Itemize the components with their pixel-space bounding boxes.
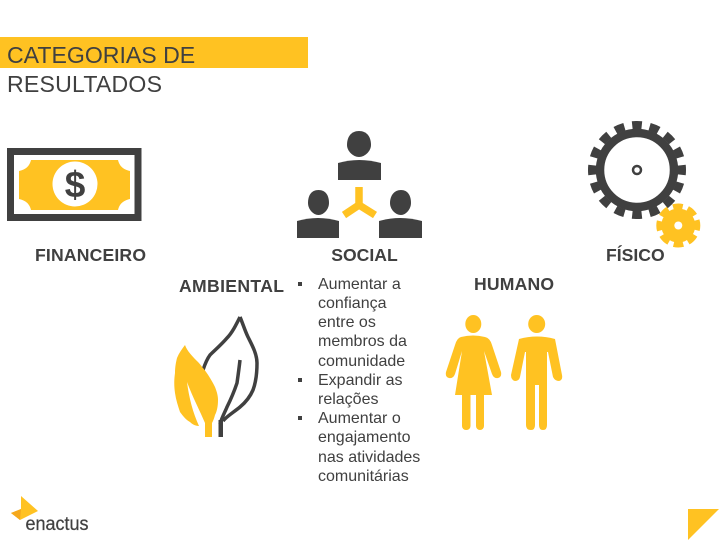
- bullet list: Aumentar a: [318, 276, 401, 293]
- icon: small yellow gear: [660, 207, 697, 244]
- icon: gears: [592, 125, 697, 244]
- corner triangle: [688, 509, 719, 540]
- bullet list: comunitárias: [318, 468, 409, 485]
- icon: woman and man: [446, 315, 562, 430]
- label: fisico: FÍSICO: [606, 244, 665, 265]
- icon: leaves: [174, 317, 257, 437]
- bullet list: nas atividades: [318, 449, 420, 466]
- icon: woman: [446, 315, 501, 430]
- logo: enactus: [11, 496, 89, 535]
- icon: banknote: [10, 152, 138, 218]
- label: humano: HUMANO: [474, 274, 554, 294]
- bullet list: Expandir as: [318, 372, 402, 389]
- icon: social group: [297, 131, 422, 238]
- label: social: SOCIAL: [331, 245, 398, 265]
- bullet list: entre os: [318, 314, 376, 331]
- bullet list: membros da: [318, 333, 407, 350]
- title: [0, 37, 308, 97]
- icon: yellow connector: [344, 187, 375, 215]
- bullet list: engajamento: [318, 429, 411, 446]
- logo: enactus: enactus: [26, 513, 89, 535]
- bullet list: comunidade: [318, 353, 405, 370]
- title: CATEGORIAS DE: [7, 42, 195, 68]
- label: ambiental: AMBIENTAL: [179, 276, 284, 296]
- icon: banknote: $: [65, 164, 86, 205]
- bullet list: [298, 276, 420, 485]
- title: RESULTADOS: [7, 71, 162, 97]
- bullet list: confiança: [318, 295, 387, 312]
- label: financeiro: FINANCEIRO: [35, 245, 146, 265]
- icon: man: [511, 315, 562, 430]
- bullet list: Aumentar o: [318, 410, 401, 427]
- bullet list: relações: [318, 391, 378, 408]
